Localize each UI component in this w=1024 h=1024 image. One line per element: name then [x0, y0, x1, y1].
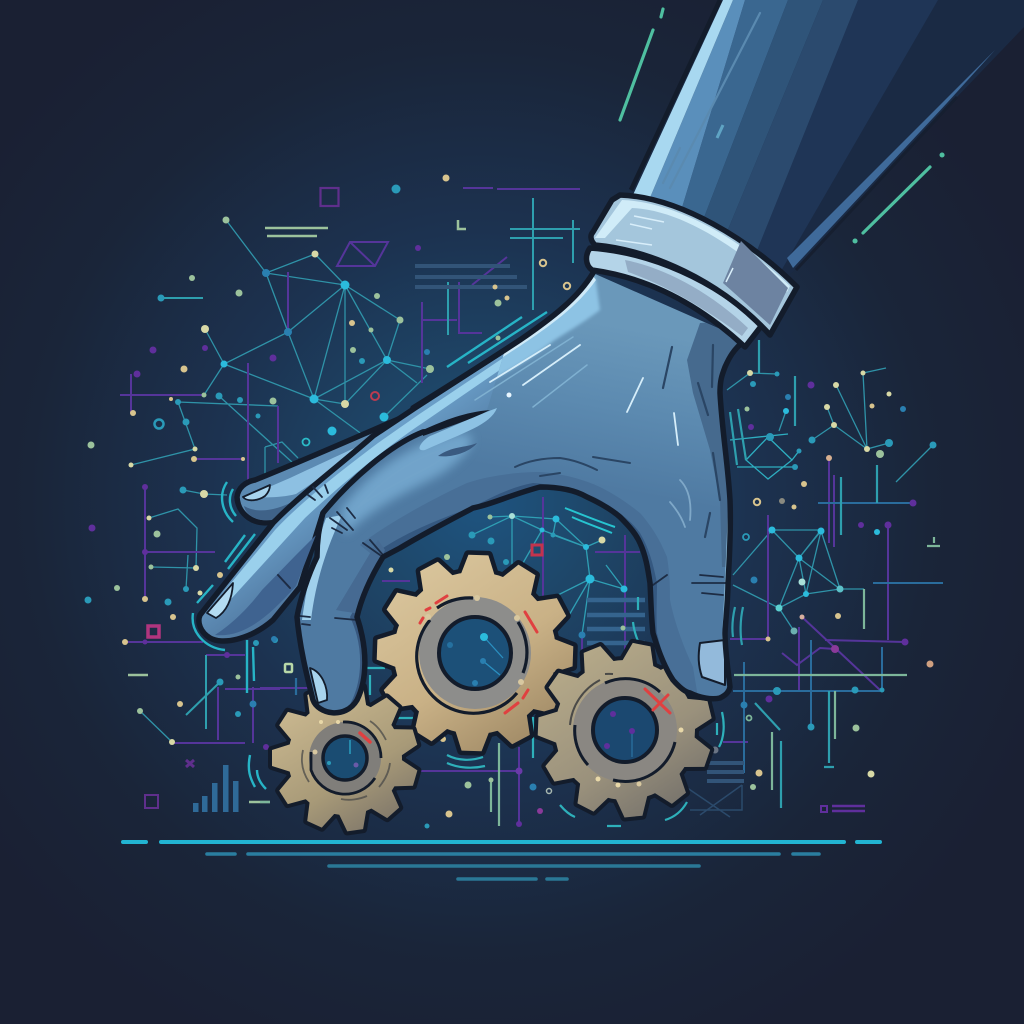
ring outlines [575, 679, 675, 782]
right faint box [680, 783, 742, 817]
center cyan arcs [565, 508, 615, 533]
cuff [586, 195, 797, 347]
sleeve lower edge highlight [787, 50, 995, 268]
right purple lines [723, 460, 905, 742]
purple circuit lines [120, 188, 580, 743]
right rings and icon [743, 499, 865, 812]
bottom lines [123, 842, 880, 879]
hand [199, 273, 750, 713]
palm and third finger fill [297, 273, 745, 713]
center teal and green lines [260, 597, 724, 826]
red cross mark [645, 689, 670, 713]
center network under palm [260, 497, 724, 828]
third finger nail [310, 668, 327, 703]
thumb right highlight [722, 514, 728, 640]
soft light near knuckles [340, 433, 472, 535]
crease highlight [420, 408, 497, 450]
ring outlines [417, 598, 527, 713]
lower cuff band [586, 248, 762, 347]
network links [131, 220, 430, 742]
upper cuff band [591, 195, 797, 335]
long finger nail [207, 583, 233, 618]
gear: left [268, 684, 422, 836]
right side shade [687, 322, 737, 567]
gear: right [534, 638, 716, 822]
cuff shadow panel [723, 241, 788, 325]
sleeve accent lines [620, 9, 942, 241]
hub contents [483, 637, 503, 675]
left data network [84, 174, 580, 812]
faint data bars [415, 266, 527, 287]
icon: red square [532, 545, 542, 555]
left nodes [84, 174, 510, 750]
red mark [360, 733, 370, 742]
sleeve [626, 0, 1024, 290]
right green lines [734, 537, 940, 790]
long finger knuckle [308, 485, 328, 500]
hub contents [631, 731, 633, 757]
ring outlines [311, 722, 381, 794]
long finger [199, 340, 560, 641]
thumb nail [699, 640, 725, 685]
long finger highlight [207, 350, 520, 612]
right faint bars [707, 763, 744, 781]
center nodes [271, 513, 718, 828]
rings and small icons [145, 188, 570, 808]
right blue lines [733, 503, 943, 773]
right data network [680, 340, 943, 817]
red dashes [420, 596, 537, 713]
palm underside shade [360, 472, 700, 710]
right network links [727, 368, 933, 631]
sleeve dark edges [631, 0, 720, 190]
back finger [237, 410, 440, 523]
center lines [472, 516, 624, 635]
cyan motion lines [193, 312, 547, 789]
teal circuit lines [161, 198, 580, 729]
right nodes [740, 370, 936, 790]
back finger nail [243, 485, 270, 500]
sleeve streaks [663, 13, 760, 188]
pale green lines [128, 228, 328, 802]
hub contents [349, 740, 351, 754]
right teal lines [730, 340, 877, 808]
bar chart [193, 765, 238, 812]
top edge highlight [496, 276, 601, 380]
hand outlines [297, 273, 745, 713]
third finger highlight and shade [302, 515, 342, 620]
palm creases and lines [300, 337, 727, 625]
sleeve colour bands [750, 0, 938, 290]
crease taper [423, 410, 490, 436]
center bars [587, 600, 645, 643]
center purple lines [260, 497, 640, 823]
gear: center [372, 550, 578, 756]
hand shading [302, 275, 750, 712]
